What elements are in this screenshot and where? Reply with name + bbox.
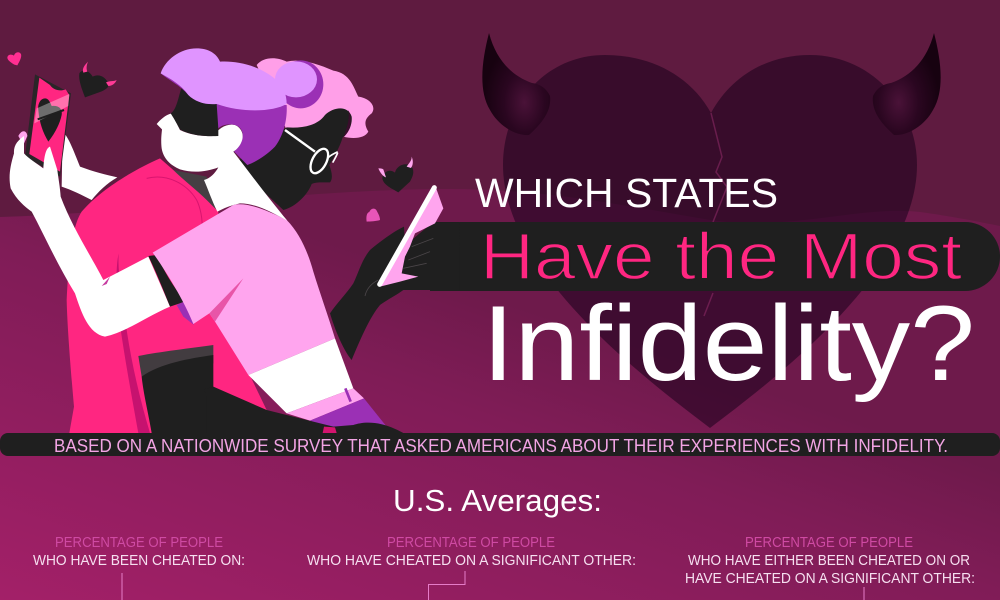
pale pink shirt bbox=[153, 204, 335, 375]
title bbox=[475, 170, 975, 403]
shirt lower band bbox=[287, 388, 364, 421]
column 2 label bbox=[307, 534, 636, 569]
left horn bbox=[482, 33, 550, 135]
pink finger behind hand bbox=[18, 131, 27, 145]
illustration: couple looking at phones bbox=[7, 48, 460, 433]
back person finger lines bbox=[365, 238, 433, 296]
right horn bbox=[873, 33, 941, 135]
back person hair bbox=[257, 58, 373, 138]
column 3 label: WHO HAVE EITHER BEEN CHEATED ON OR bbox=[688, 552, 970, 569]
subtitle banner: BASED ON A NATIONWIDE SURVEY THAT ASKED AMERICANS ABOUT THEIR EXPERIENCES WITH INFIDELITY. bbox=[54, 435, 948, 456]
front person dark head bbox=[171, 87, 218, 136]
purple bun shade bbox=[278, 60, 323, 108]
shoe tag bbox=[323, 427, 337, 433]
light purple bun bbox=[275, 61, 317, 97]
title pill bbox=[430, 222, 1000, 291]
icon: devil heart right bbox=[378, 157, 413, 192]
column 2 label: WHO HAVE CHEATED ON A SIGNIFICANT OTHER: bbox=[307, 552, 636, 569]
title line 2: Have the Most bbox=[480, 219, 962, 293]
white shirt hem bbox=[248, 338, 353, 413]
column 3 label bbox=[685, 534, 975, 587]
shirt fold bbox=[209, 278, 243, 322]
column 1 label: PERCENTAGE OF PEOPLE bbox=[55, 534, 223, 551]
left phone bbox=[25, 74, 71, 177]
column 3 label: HAVE CHEATED ON A SIGNIFICANT OTHER: bbox=[685, 570, 975, 587]
icon: devil heart top left bbox=[79, 62, 117, 97]
column 1 label: WHO HAVE BEEN CHEATED ON: bbox=[33, 552, 245, 569]
dark gap under sleeve bbox=[148, 255, 185, 307]
title line 1: WHICH STATES bbox=[475, 170, 778, 216]
white arm and holding hand bbox=[10, 136, 170, 337]
icon: small pink heart top left bbox=[7, 52, 21, 65]
front person pink shirt bbox=[67, 158, 267, 433]
background: lower wave bbox=[0, 189, 1000, 600]
shirt seam bbox=[147, 177, 202, 230]
black lower leg bbox=[204, 387, 403, 433]
hand behind phone bbox=[62, 132, 117, 200]
column 1 label bbox=[33, 534, 245, 569]
purple hair shadow and back of hair bbox=[161, 73, 287, 165]
section heading: U.S. Averages: bbox=[393, 483, 602, 518]
icon: pink heart right bbox=[366, 209, 380, 222]
front person shorts shadow bbox=[138, 345, 213, 377]
shirt shading strip bbox=[117, 253, 150, 433]
back person arm and hand bbox=[330, 223, 460, 360]
back person hair shadow bbox=[343, 110, 351, 137]
front person black trousers bbox=[142, 355, 333, 433]
light purple hair bbox=[161, 48, 287, 110]
column 3 label: PERCENTAGE OF PEOPLE bbox=[745, 534, 913, 551]
purple fold bbox=[177, 302, 194, 325]
shorts seam bbox=[345, 388, 351, 402]
back person head bbox=[233, 108, 352, 210]
purple shorts bbox=[310, 398, 387, 433]
connector lines bbox=[122, 571, 864, 600]
title line 3: Infidelity? bbox=[482, 283, 975, 403]
broken heart with devil horns bbox=[482, 33, 941, 428]
heart crack bbox=[704, 113, 727, 316]
front person face and neck bbox=[157, 113, 287, 221]
column 2 label: PERCENTAGE OF PEOPLE bbox=[387, 534, 555, 551]
heart bbox=[503, 55, 917, 428]
right phone bbox=[380, 185, 443, 287]
glasses bbox=[285, 130, 338, 176]
arm crease bbox=[102, 277, 110, 286]
front person neck shadow bbox=[173, 170, 217, 210]
